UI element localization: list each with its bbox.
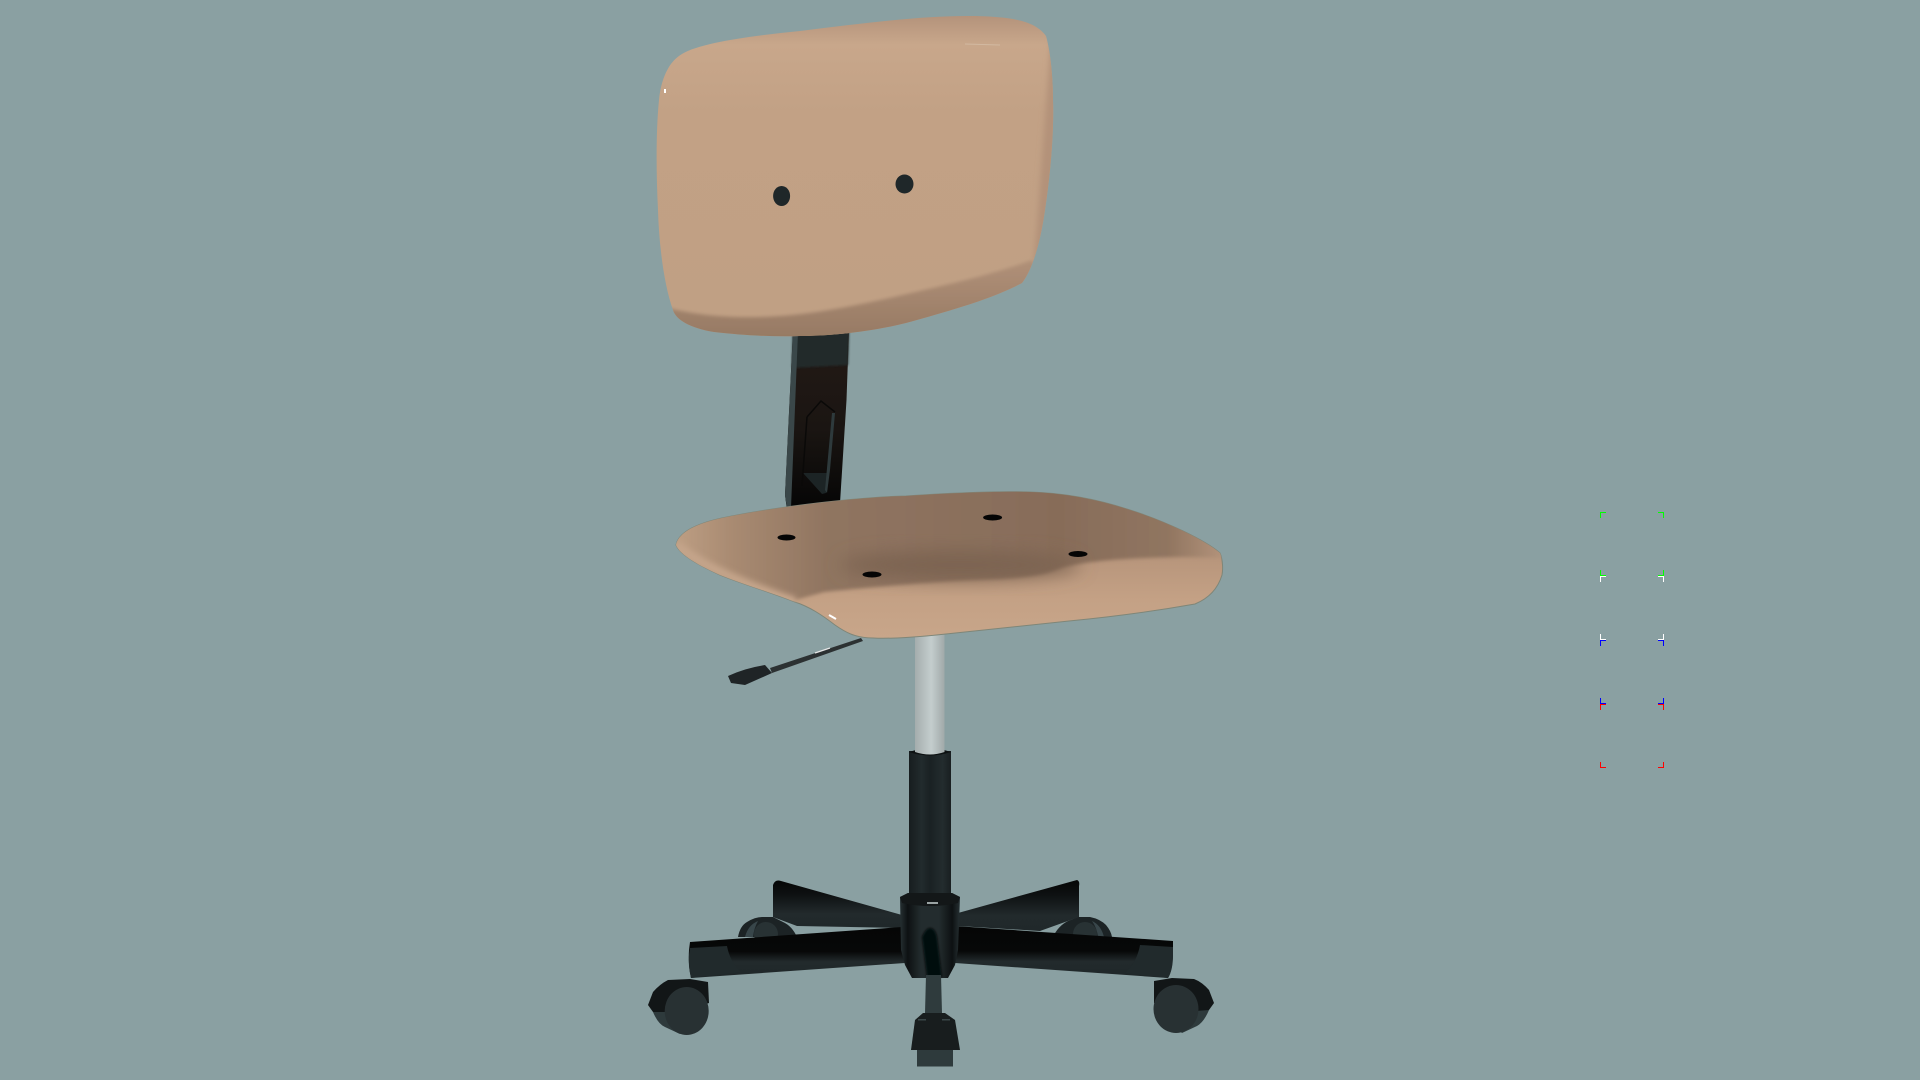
left caster [648, 979, 709, 1035]
red markers [1600, 704, 1664, 768]
far wheel left [738, 917, 797, 946]
backrest lower edge band [672, 261, 1032, 336]
backrest left hole [773, 186, 790, 206]
backrest right hole [896, 174, 914, 194]
seat hole right [1068, 551, 1088, 557]
seat left rim [676, 545, 795, 602]
back-left base arm [773, 880, 902, 928]
white markers [1600, 576, 1664, 640]
back-right base arm [958, 880, 1079, 931]
seat [670, 480, 1235, 638]
seat hole back [983, 514, 1002, 520]
seat hole front-left [778, 534, 796, 540]
right base arm [955, 926, 1173, 978]
back support stem [785, 330, 849, 510]
blue markers [1600, 640, 1664, 704]
backrest side shading [1035, 54, 1054, 254]
seat upper surface [676, 492, 1222, 600]
lift piston [915, 630, 944, 754]
front caster [911, 1013, 960, 1066]
seat hole front [862, 572, 882, 578]
scene: office chair render [648, 16, 1664, 1066]
gas cylinder [909, 748, 951, 897]
height adjustment lever [728, 638, 863, 685]
calibration markers [1600, 512, 1664, 768]
right caster [1154, 978, 1214, 1033]
green markers [1600, 512, 1664, 576]
front base leg [925, 975, 942, 1013]
far wheel right [1053, 917, 1112, 946]
backrest [657, 16, 1060, 350]
left base arm [689, 927, 905, 978]
base hub collar [900, 893, 960, 978]
seat central shadow [840, 551, 1080, 579]
